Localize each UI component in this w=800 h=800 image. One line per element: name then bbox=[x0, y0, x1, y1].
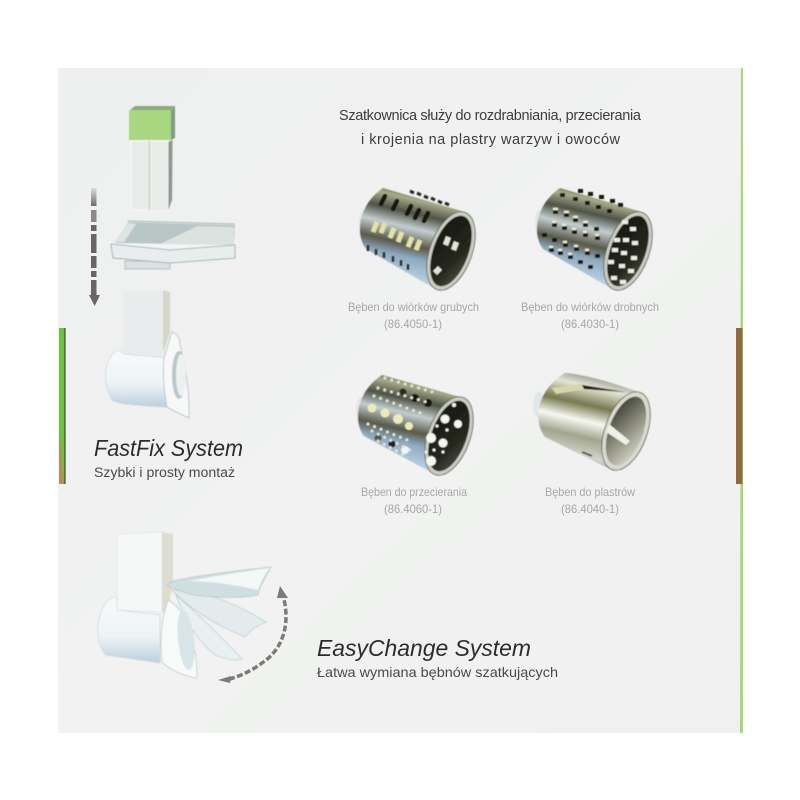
drum housing bbox=[106, 290, 189, 418]
caption: slicing: Bęben do plastrów bbox=[545, 485, 635, 499]
FastFix title: FastFix System bbox=[94, 435, 243, 461]
EasyChange subtitle: Łatwa wymiana bębnów szatkujących bbox=[317, 664, 558, 680]
slicing blade slot bbox=[552, 384, 626, 394]
caption: grating bbox=[361, 485, 467, 516]
heading: i krojenia na plastry warzyw i owoców bbox=[361, 132, 621, 148]
fine slots bbox=[542, 191, 623, 267]
heading bbox=[339, 108, 642, 148]
arrow: rotation bbox=[218, 586, 288, 683]
caption: slicing: (86.4040-1) bbox=[561, 502, 619, 516]
caption: fine shred: (86.4030-1) bbox=[561, 317, 619, 331]
fan of cover positions bbox=[167, 567, 271, 660]
icon: drum coarse shred bbox=[359, 188, 485, 297]
caption: coarse shred: Bęben do wiórków grubych bbox=[348, 300, 479, 314]
caption: fine shred: Bęben do wiórków drobnych bbox=[521, 300, 659, 314]
grating holes bbox=[368, 388, 432, 454]
arrow: downward dashed bbox=[89, 188, 100, 306]
tray bbox=[111, 221, 235, 269]
icon: drum slicing bbox=[533, 373, 660, 477]
caption: grating: Bęben do przecierania bbox=[361, 485, 467, 499]
pusher bbox=[129, 106, 175, 211]
green right edge bbox=[740, 68, 743, 733]
FastFix subtitle: Szybki i prosty montaż bbox=[94, 465, 235, 480]
housing bbox=[98, 532, 173, 663]
icon: drum grating bbox=[356, 375, 483, 482]
left side strip bbox=[59, 328, 66, 484]
caption: slicing bbox=[545, 485, 635, 516]
coarse slots bbox=[381, 196, 428, 221]
heading: Szatkownica służy do rozdrabniania, przecierania bbox=[339, 108, 642, 124]
caption: coarse shred: (86.4050-1) bbox=[384, 317, 442, 331]
panel: box face bbox=[58, 68, 743, 733]
caption: coarse shred bbox=[348, 300, 479, 331]
icon: EasyChange rotating cover bbox=[98, 532, 271, 678]
right side strip bbox=[736, 328, 742, 484]
EasyChange title: EasyChange System bbox=[317, 635, 531, 661]
icon: FastFix exploded assembly bbox=[106, 106, 235, 418]
caption: grating: (86.4060-1) bbox=[384, 502, 442, 516]
caption: fine shred bbox=[521, 300, 659, 331]
icon: drum fine shred bbox=[535, 188, 662, 297]
cover front bbox=[161, 600, 197, 678]
